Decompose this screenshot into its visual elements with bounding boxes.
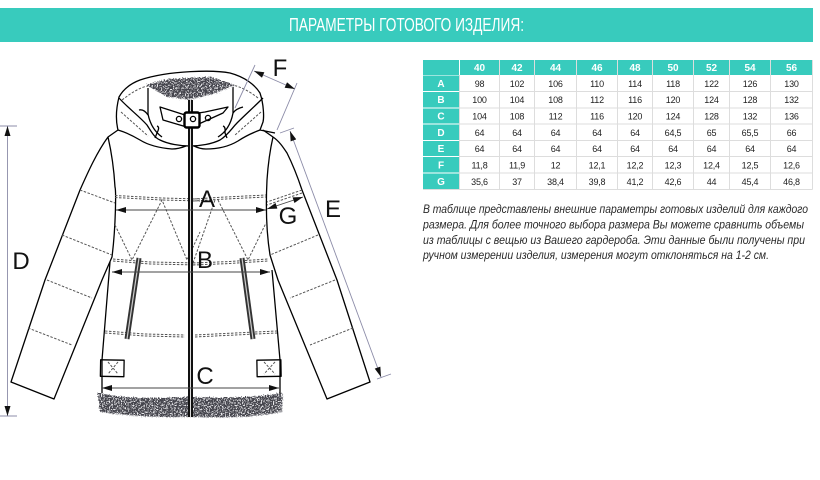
row A values: 130	[784, 79, 799, 89]
table header row: 40	[474, 63, 485, 74]
row C values: 120	[628, 112, 642, 122]
table header row: 44	[550, 63, 561, 74]
row B values	[472, 95, 799, 105]
measure E: E	[325, 196, 341, 223]
row G values: 46,8	[783, 177, 800, 187]
row C values: 116	[590, 112, 604, 122]
row F values: 11,8	[471, 160, 488, 170]
measure F: F	[273, 55, 287, 82]
table row labels: C	[437, 112, 445, 122]
row E values	[475, 144, 796, 154]
measure B: B	[197, 247, 213, 274]
row B values: 116	[628, 95, 642, 105]
quilting stitches	[28, 190, 353, 345]
row D values: 64	[592, 128, 602, 138]
table header row: 54	[744, 63, 756, 74]
row C values: 124	[666, 112, 680, 122]
row G values: 39,8	[589, 177, 606, 187]
row A values: 98	[475, 79, 484, 89]
buckle pin	[190, 116, 196, 122]
row E values: 64	[630, 144, 640, 154]
row A values: 122	[704, 79, 719, 89]
row B values: 104	[510, 95, 524, 105]
row B values: 128	[743, 95, 757, 105]
row D values: 64	[551, 128, 560, 138]
table header row: 48	[629, 63, 641, 74]
row G values	[471, 177, 800, 187]
row C values: 132	[743, 112, 757, 122]
measure G	[267, 197, 303, 230]
row B values: 124	[704, 95, 719, 105]
row G values: 44	[707, 177, 716, 187]
header band	[0, 8, 813, 42]
explanatory note: ручном измерении изделия, измерения могут отклоняться на 1-2 см.	[422, 250, 769, 262]
row E values: 64	[512, 144, 522, 154]
row E values: 64	[787, 144, 796, 154]
row A values: 126	[743, 79, 757, 89]
row A values: 110	[590, 79, 604, 89]
row D values: 64	[475, 128, 484, 138]
row F values: 12,4	[703, 160, 720, 170]
table row labels: G	[437, 177, 445, 188]
measure D: D	[12, 248, 30, 275]
row G values: 38,4	[547, 177, 564, 187]
row F values: 12,1	[589, 160, 606, 170]
explanatory note	[422, 204, 809, 262]
row E values: 64	[745, 144, 755, 154]
size table	[423, 60, 812, 190]
measure G: G	[279, 203, 297, 230]
table grid	[423, 60, 812, 190]
row G values: 35,6	[471, 177, 488, 187]
jacket technical drawing	[11, 71, 370, 417]
row C values: 112	[549, 112, 563, 122]
table header row: 42	[511, 63, 523, 74]
table row labels	[423, 76, 459, 189]
row D values: 64	[630, 128, 640, 138]
row B values: 108	[548, 95, 563, 105]
row G values: 45,4	[742, 177, 759, 187]
row E values: 64	[475, 144, 484, 154]
row B values: 120	[666, 95, 680, 105]
buckle over zipper	[184, 112, 200, 128]
table header row: 52	[706, 63, 717, 74]
hood fur trim	[146, 77, 235, 100]
row C values: 108	[510, 112, 524, 122]
row A values	[475, 79, 799, 89]
row A values: 118	[666, 79, 680, 89]
table header row: 56	[786, 63, 797, 74]
right cuff patch	[257, 360, 281, 377]
table header row: 50	[667, 63, 679, 74]
row G values: 42,6	[665, 177, 682, 187]
row F values: 12,2	[627, 160, 644, 170]
hood	[116, 71, 275, 149]
table row labels: F	[438, 160, 444, 172]
hem fur	[98, 393, 283, 417]
row G values: 41,2	[627, 177, 644, 187]
row B values: 112	[590, 95, 604, 105]
row C values: 104	[472, 112, 487, 122]
title: ПАРАМЕТРЫ ГОТОВОГО ИЗДЕЛИЯ:	[289, 15, 524, 35]
row C values: 128	[704, 112, 719, 122]
row D values: 66	[787, 128, 796, 138]
table header row	[423, 60, 812, 75]
table row labels: B	[437, 95, 445, 106]
row F values: 11,9	[509, 160, 525, 170]
left cuff patch	[100, 360, 124, 377]
table row labels: E	[438, 144, 445, 155]
row C values	[472, 112, 799, 122]
collar strap	[160, 107, 228, 128]
row E values: 64	[668, 144, 678, 154]
row D values: 64	[512, 128, 522, 138]
row A values: 106	[548, 79, 563, 89]
row A values: 102	[510, 79, 524, 89]
row C values: 136	[784, 112, 799, 122]
row D values: 65,5	[742, 128, 759, 138]
zipper	[188, 100, 193, 417]
measure A: A	[199, 186, 215, 213]
row B values: 100	[472, 95, 487, 105]
left pocket	[127, 258, 139, 339]
row F values: 12	[551, 160, 560, 170]
right pocket	[242, 258, 253, 339]
measure D	[0, 126, 30, 416]
table row labels: D	[437, 128, 445, 139]
row E values: 64	[592, 144, 602, 154]
table header row: 46	[591, 63, 603, 74]
row G values: 37	[512, 177, 522, 187]
jacket body and sleeves outline	[11, 130, 370, 399]
row F values	[471, 160, 800, 170]
row D values: 64,5	[665, 128, 682, 138]
hood toggles	[155, 126, 227, 138]
row D values	[475, 128, 796, 138]
measure C: C	[196, 363, 214, 390]
row D values: 65	[707, 128, 716, 138]
row B values: 132	[784, 95, 799, 105]
row F values: 12,3	[665, 160, 682, 170]
row E values: 64	[551, 144, 560, 154]
row E values: 64	[707, 144, 716, 154]
table row labels: A	[437, 79, 445, 90]
row A values: 114	[628, 79, 642, 89]
measure F	[235, 55, 297, 130]
row F values: 12,6	[783, 160, 800, 170]
row F values: 12,5	[742, 160, 759, 170]
measure E	[280, 128, 391, 379]
